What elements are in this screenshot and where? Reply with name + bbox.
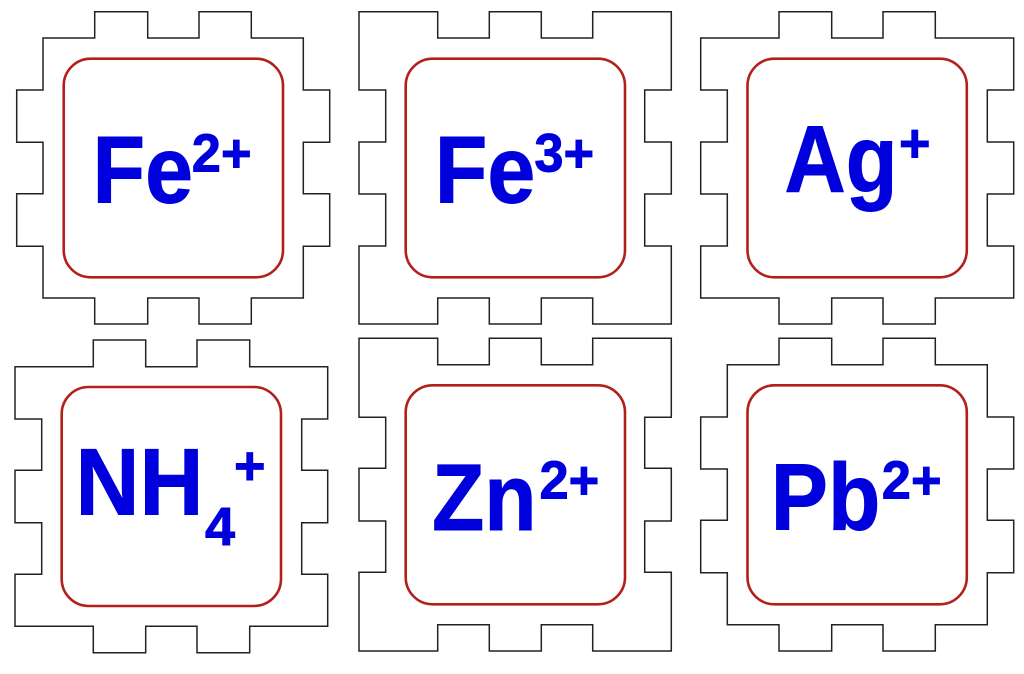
ion charge: 3+ <box>534 124 594 184</box>
ion charge: + <box>234 436 266 496</box>
puzzle outline <box>17 12 330 324</box>
ion label: NH <box>76 429 204 535</box>
ion charge: 2+ <box>192 124 252 184</box>
puzzle outline <box>359 12 671 324</box>
red rounded frame <box>64 59 283 277</box>
puzzle outline <box>15 340 328 653</box>
red rounded frame <box>748 59 967 277</box>
ion label: Ag <box>784 107 898 213</box>
puzzle card: Fe2+ <box>17 12 330 324</box>
puzzle card: Fe3+ <box>359 12 671 324</box>
puzzle card: NH4+ <box>15 340 328 653</box>
puzzle card: Ag+ <box>701 12 1014 324</box>
red rounded frame <box>748 385 967 604</box>
ion charge: 2+ <box>540 451 599 511</box>
ion label: Fe <box>435 117 535 223</box>
red rounded frame <box>406 59 625 277</box>
ion label: Zn <box>432 445 537 551</box>
puzzle outline <box>701 12 1014 324</box>
red rounded frame <box>62 387 281 606</box>
ion label: Pb <box>771 444 880 550</box>
puzzle card: Pb2+ <box>701 338 1014 651</box>
puzzle outline <box>701 338 1014 651</box>
ion charge: + <box>899 113 931 173</box>
puzzle card: Zn2+ <box>359 338 671 651</box>
ion label: Fe <box>92 117 193 223</box>
ion charge: 2+ <box>882 450 942 510</box>
red rounded frame <box>406 385 625 604</box>
subscript 4: 4 <box>205 497 235 557</box>
puzzle outline <box>359 338 671 651</box>
